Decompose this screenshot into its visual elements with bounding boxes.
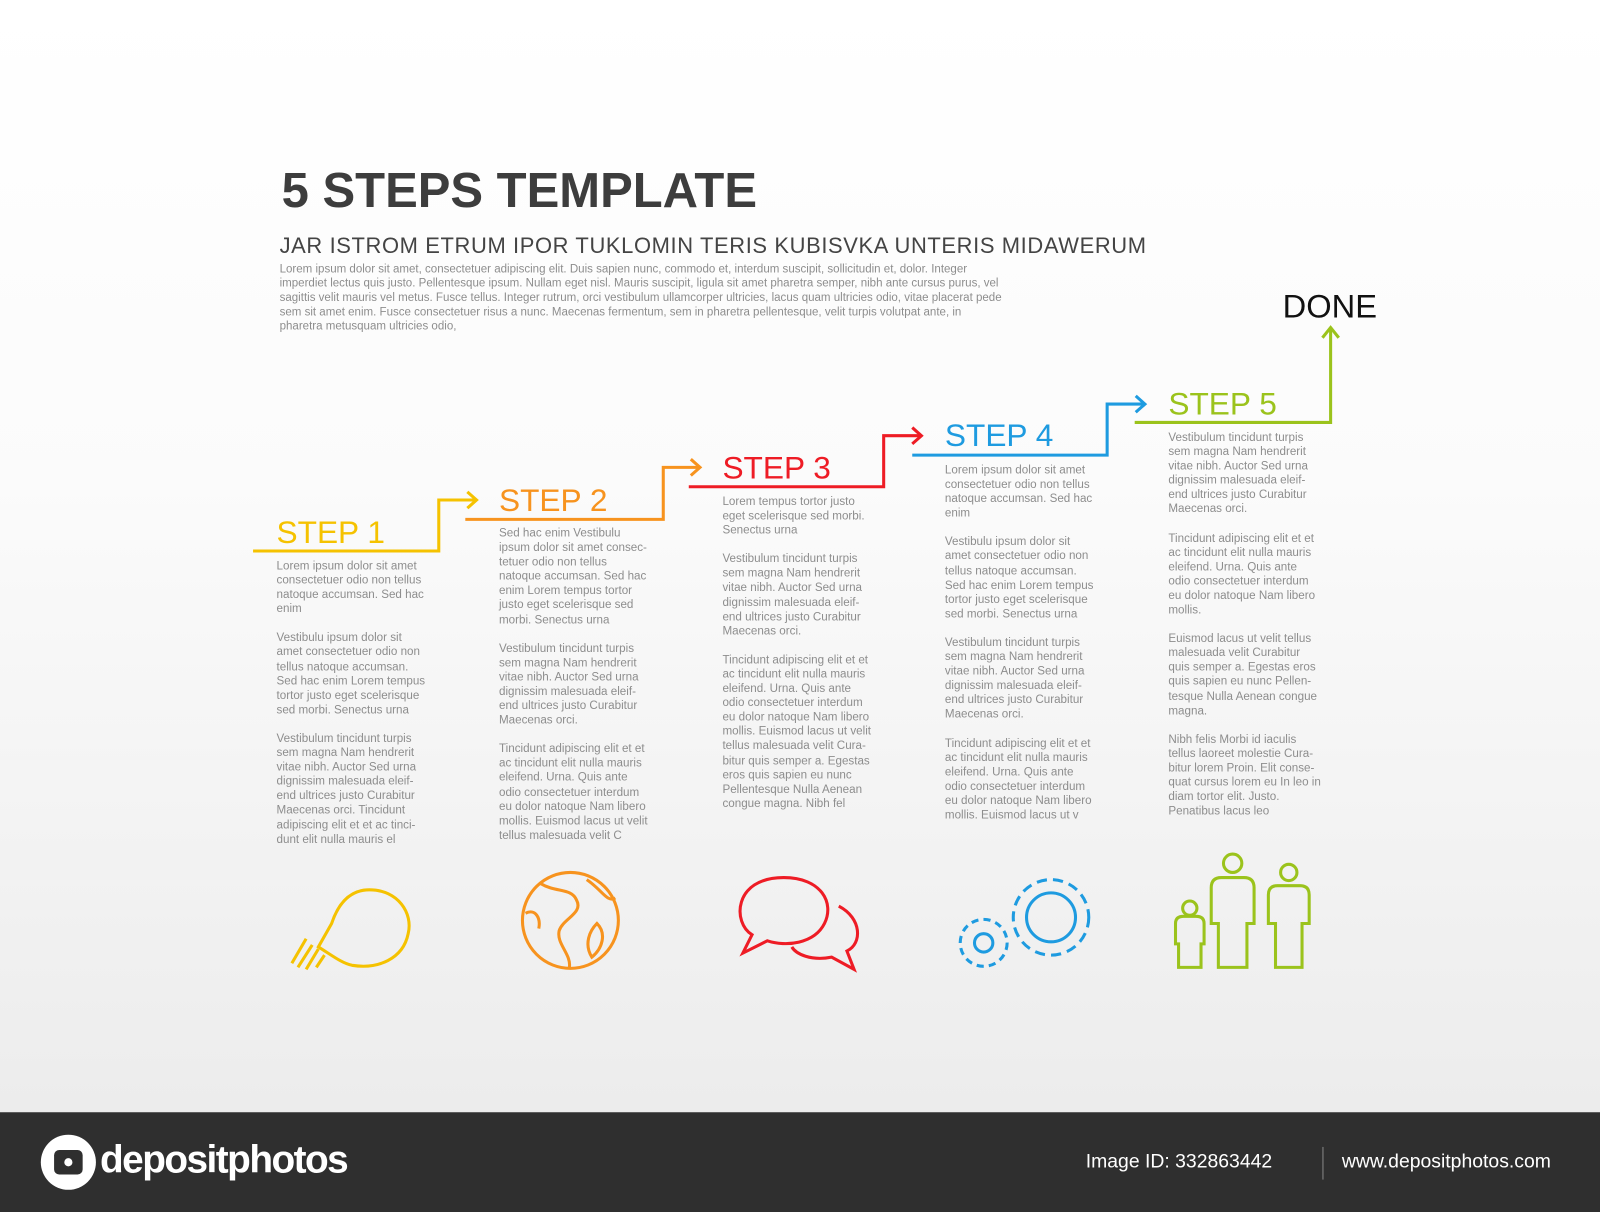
step 2 text: Vestibulum tincidunt turpis sem magna Nam hendrerit vitae nibh. Auctor Sed urna dignissim malesuada eleif-end ultrices justo Curabitur Maecenas orci. [499, 643, 639, 727]
step 4 text: Lorem ipsum dolor sit amet consectetuer odio non tellus natoque accumsan. Sed hac enim [945, 464, 1092, 520]
step 1 text: Vestibulu ipsum dolor sit amet consectetuer odio non tellus natoque accumsan. Sed hac enim Lorem tempus tortor justo eget scelerisque sed morbi. Senectus urna [277, 632, 425, 716]
step 4 text: Vestibulu ipsum dolor sit amet consectetuer odio non tellus natoque accumsan. Sed hac enim Lorem tempus tortor justo eget scelerisque sed morbi. Senectus urna [945, 536, 1093, 620]
step 2 heading: STEP 2 [499, 483, 607, 518]
footer logo [40, 1134, 348, 1190]
step 2 text: Tincidunt adipiscing elit et et ac tincidunt elit nulla mauris eleifend. Urna. Quis ante odio consectetuer interdum eu dolor natoque Nam libero mollis. Euismod lacus ut velit tellus malesuada velit C [499, 743, 648, 842]
step 5 text: Nibh felis Morbi id iaculis tellus laoreet molestie Cura-bitur lorem Proin. Elit conse-quat cursus lorem eu In leo in diam tortor elit. Justo. Penatibus lacus leo [1168, 733, 1321, 818]
footer logo: depositphotos [100, 1139, 347, 1182]
subtitle: JAR ISTROM ETRUM IPOR TUKLOMIN TERIS KUBISVKA UNTERIS MIDAWERUM [280, 234, 1147, 258]
image id: Image ID: 332863442 [1086, 1151, 1272, 1172]
step 4 text [945, 464, 1093, 821]
icon: light bulb [292, 890, 409, 969]
done label: DONE [1283, 288, 1377, 324]
step 3 text: Tincidunt adipiscing elit et et ac tincidunt elit nulla mauris eleifend. Urna. Quis ante odio consectetuer interdum eu dolor natoque Nam libero mollis. Euismod lacus ut velit tellus malesuada velit Cura-bitur quis semper a. Egestas eros quis sapien eu nunc Pellentesque Nulla Aenean congue magna. Nibh fel [722, 654, 871, 810]
title: 5 STEPS TEMPLATE [282, 164, 757, 218]
step 1 text: Vestibulum tincidunt turpis sem magna Nam hendrerit vitae nibh. Auctor Sed urna dignissim malesuada eleif-end ultrices justo Curabitur Maecenas orci. Tincidunt adipiscing elit et et ac tinci-dunt elit nulla mauris el [277, 733, 416, 846]
step 4 text: Vestibulum tincidunt turpis sem magna Nam hendrerit vitae nibh. Auctor Sed urna dignissim malesuada eleif-end ultrices justo Curabitur Maecenas orci. [945, 637, 1084, 721]
step 3 heading: STEP 3 [722, 450, 831, 486]
step 3 text: Lorem tempus tortor justo eget scelerisque sed morbi. Senectus urna [722, 496, 865, 537]
step 5 text: Tincidunt adipiscing elit et et ac tincidunt elit nulla mauris eleifend. Urna. Quis ante odio consectetuer interdum eu dolor natoque Nam libero mollis. [1168, 532, 1315, 616]
step 1 text: Lorem ipsum dolor sit amet consectetuer odio non tellus natoque accumsan. Sed hac enim [277, 560, 424, 616]
step 3 text [722, 496, 871, 810]
step 5 heading: STEP 5 [1168, 386, 1277, 421]
footer bar [0, 1112, 1600, 1212]
intro text: Lorem ipsum dolor sit amet, consectetuer adipiscing elit. Duis sapien nunc, commodo et, interdum suscipit, sollicitudin et, dolor. Integer imperdiet lectus quis justo. Pellentesque ipsum. Nullam eget nisl. Mauris suscipit, ligula sit amet pharetra semper, nibh ante cursus purus, vel sagittis velit mauris vel metus. Fusce tellus. Integer rutrum, orci vestibulum ullamcorper ultricies, lacus quam ultricies odio, vitae placerat pede sem sit amet enim. Fusce consectetuer risus a nunc. Maecenas fermentum, sem in pharetra pellentesque, velit turpis volutpat ante, in pharetra metusquam ultricies odio, [280, 263, 1002, 333]
icon: camera logo [41, 1135, 96, 1190]
icon: gears [960, 880, 1089, 966]
step 4 heading: STEP 4 [945, 417, 1053, 453]
step 5 text [1168, 432, 1321, 818]
step 5 text: Vestibulum tincidunt turpis sem magna Nam hendrerit vitae nibh. Auctor Sed urna dignissim malesuada eleif-end ultrices justo Curabitur Maecenas orci. [1168, 432, 1308, 516]
site url: www.depositphotos.com [1342, 1151, 1551, 1172]
step 4 text: Tincidunt adipiscing elit et et ac tincidunt elit nulla mauris eleifend. Urna. Quis ante odio consectetuer interdum eu dolor natoque Nam libero mollis. Euismod lacus ut v [945, 737, 1092, 821]
icon: family [1176, 854, 1309, 967]
icon: globe [522, 872, 618, 968]
step 2 text: Sed hac enim Vestibulu ipsum dolor sit amet consec-tetuer odio non tellus natoque accumsan. Sed hac enim Lorem tempus tortor justo eget scelerisque sed morbi. Senectus urna [499, 528, 647, 626]
icon: chat bubbles [740, 878, 858, 969]
step 3 text: Vestibulum tincidunt turpis sem magna Nam hendrerit vitae nibh. Auctor Sed urna dignissim malesuada eleif-end ultrices justo Curabitur Maecenas orci. [722, 553, 862, 637]
step 1 heading: STEP 1 [277, 514, 385, 550]
step 5 text: Euismod lacus ut velit tellus malesuada velit Curabitur quis semper a. Egestas eros quis sapien eu nunc Pellen-tesque Nulla Aenean congue magna. [1168, 633, 1317, 717]
step 2 text [498, 528, 648, 842]
step 1 text [276, 560, 425, 846]
